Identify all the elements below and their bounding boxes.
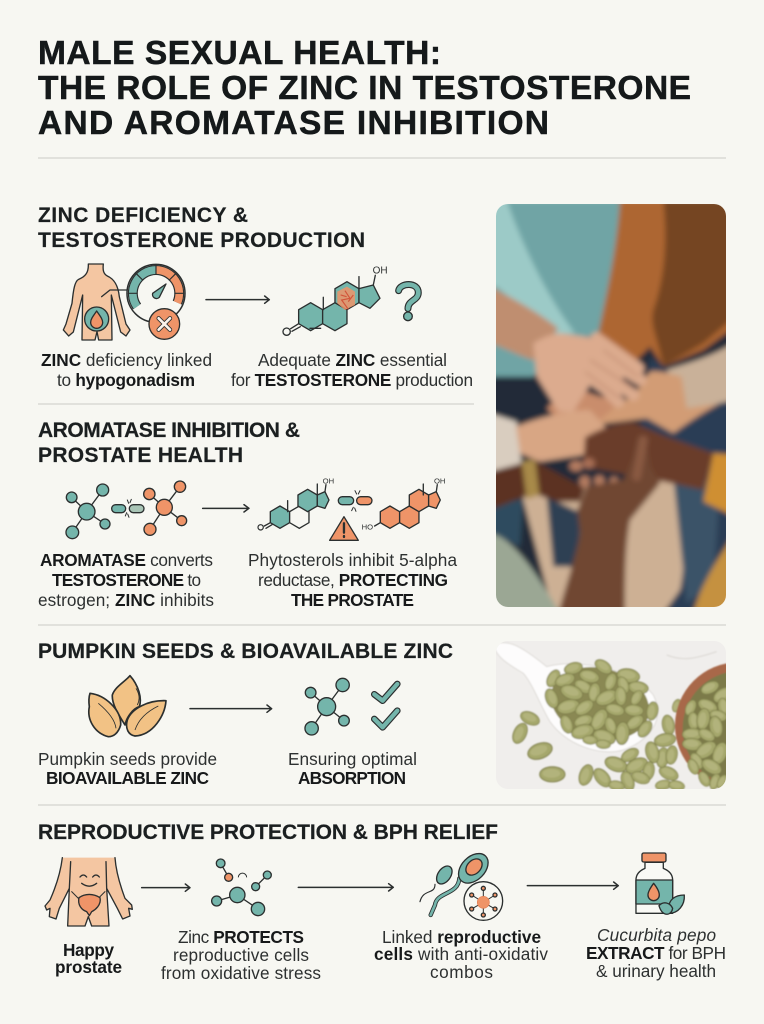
- text: hypogonadism line: to hypogonadism: [57, 370, 195, 390]
- text: cucurbita pepo extract: Cucurbita pepo: [597, 925, 716, 945]
- text: happy prostate: Happy: [63, 940, 114, 960]
- heading: pumpkin seeds: PUMPKIN SEEDS & BIOAVAILABLE ZINC: [38, 640, 453, 663]
- text: pumpkin seeds provide bioavailable zinc: Pumpkin seeds provide: [38, 749, 217, 769]
- text: ensuring optimal absorption: ABSORPTION: [298, 768, 406, 788]
- icon: happy prostate body: [45, 858, 132, 926]
- text: zinc protects: Zinc PROTECTS: [178, 927, 304, 947]
- heading: zinc deficiency: ZINC DEFICIENCY &: [38, 204, 248, 227]
- heading: aromatase inhibition: [38, 419, 300, 467]
- heading: zinc deficiency: [38, 204, 365, 252]
- text: pumpkin seeds provide bioavailable zinc: [38, 749, 217, 788]
- text: zinc protects: reproductive cells: [173, 945, 309, 965]
- icon: testosterone molecule with question mark: [283, 266, 418, 335]
- arrow: [298, 884, 393, 891]
- text: happy prostate: [55, 940, 122, 977]
- text: aromatase converts testosterone: TESTOSTERONE to: [52, 570, 201, 590]
- text: ensuring optimal absorption: [288, 749, 417, 788]
- icon: aromatase molecules: [66, 481, 187, 539]
- heading: aromatase inhibition: AROMATASE INHIBITION &: [38, 419, 300, 442]
- text: ensuring optimal absorption: Ensuring optimal: [288, 749, 417, 769]
- heading: reproductive protection: REPRODUCTIVE PROTECTION & BPH RELIEF: [38, 821, 498, 844]
- icon: molecule with check marks: [305, 678, 397, 735]
- text: phytosterols protect the prostate: THE PROSTATE: [291, 590, 414, 610]
- arrow: [206, 296, 269, 303]
- text: linked reproductive cells: combos: [430, 962, 493, 982]
- title: MALE SEXUAL HEALTH:: [38, 35, 441, 72]
- heading: zinc deficiency: TESTOSTERONE PRODUCTION: [38, 229, 365, 252]
- text: zinc protects: from oxidative stress: [161, 963, 321, 983]
- photo: stacked hands: [490, 200, 735, 613]
- text: for testosterone production: for TESTOSTERONE production: [231, 370, 473, 390]
- icon: testosterone molecule with question mark: OH: [373, 266, 388, 277]
- text: zinc protects: [161, 927, 321, 983]
- title: AND AROMATASE INHIBITION: [38, 105, 549, 142]
- text: aromatase converts testosterone: AROMATASE converts: [40, 550, 213, 570]
- text: cucurbita pepo extract: [586, 925, 726, 981]
- text: phytosterols protect the prostate: reductase, PROTECTING: [258, 570, 448, 590]
- heading: aromatase inhibition: PROSTATE HEALTH: [38, 444, 243, 467]
- text: linked reproductive cells: [374, 927, 548, 982]
- text: linked reproductive cells: cells with anti-oxidativ: [374, 944, 548, 964]
- arrow: [142, 884, 190, 891]
- arrow: [527, 882, 618, 889]
- arrow: [190, 705, 272, 712]
- title: [38, 35, 691, 142]
- photo: pumpkin seeds in spoon: [496, 641, 726, 789]
- icon: steroid conversion with warning: OH: [434, 476, 445, 485]
- text: aromatase converts testosterone: estrogen; ZINC inhibits: [38, 590, 214, 610]
- text: pumpkin seeds provide bioavailable zinc: BIOAVAILABLE ZINC: [46, 768, 209, 788]
- icon: body with zinc deficiency gauge: [63, 264, 185, 340]
- title: THE ROLE OF ZINC IN TESTOSTERONE: [38, 70, 691, 107]
- text: phytosterols protect the prostate: Phytosterols inhibit 5-alpha: [248, 550, 457, 570]
- icon: steroid conversion with warning: [258, 476, 445, 540]
- text: phytosterols protect the prostate: [248, 550, 457, 610]
- icon: steroid conversion with warning: HO: [362, 522, 373, 531]
- text: cucurbita pepo extract: EXTRACT for BPH: [586, 943, 726, 963]
- text: zinc deficiency linked to hypogonadism: ZINC deficiency linked: [41, 350, 212, 370]
- arrow: [203, 505, 249, 512]
- text: cucurbita pepo extract: & urinary health: [596, 961, 716, 981]
- icon: pumpkin seeds: [89, 676, 166, 737]
- text: adequate zinc essential: Adequate ZINC essential: [258, 350, 447, 370]
- icon: protective molecule: [212, 859, 271, 916]
- text: aromatase converts testosterone: [38, 550, 214, 610]
- text: happy prostate: prostate: [55, 957, 122, 977]
- icon: extract bottle with leaves: [636, 853, 684, 914]
- icon: sperm cells with antioxidant badge: [420, 848, 503, 920]
- icon: steroid conversion with warning: OH: [323, 476, 334, 485]
- text: linked reproductive cells: Linked reproductive: [382, 927, 541, 947]
